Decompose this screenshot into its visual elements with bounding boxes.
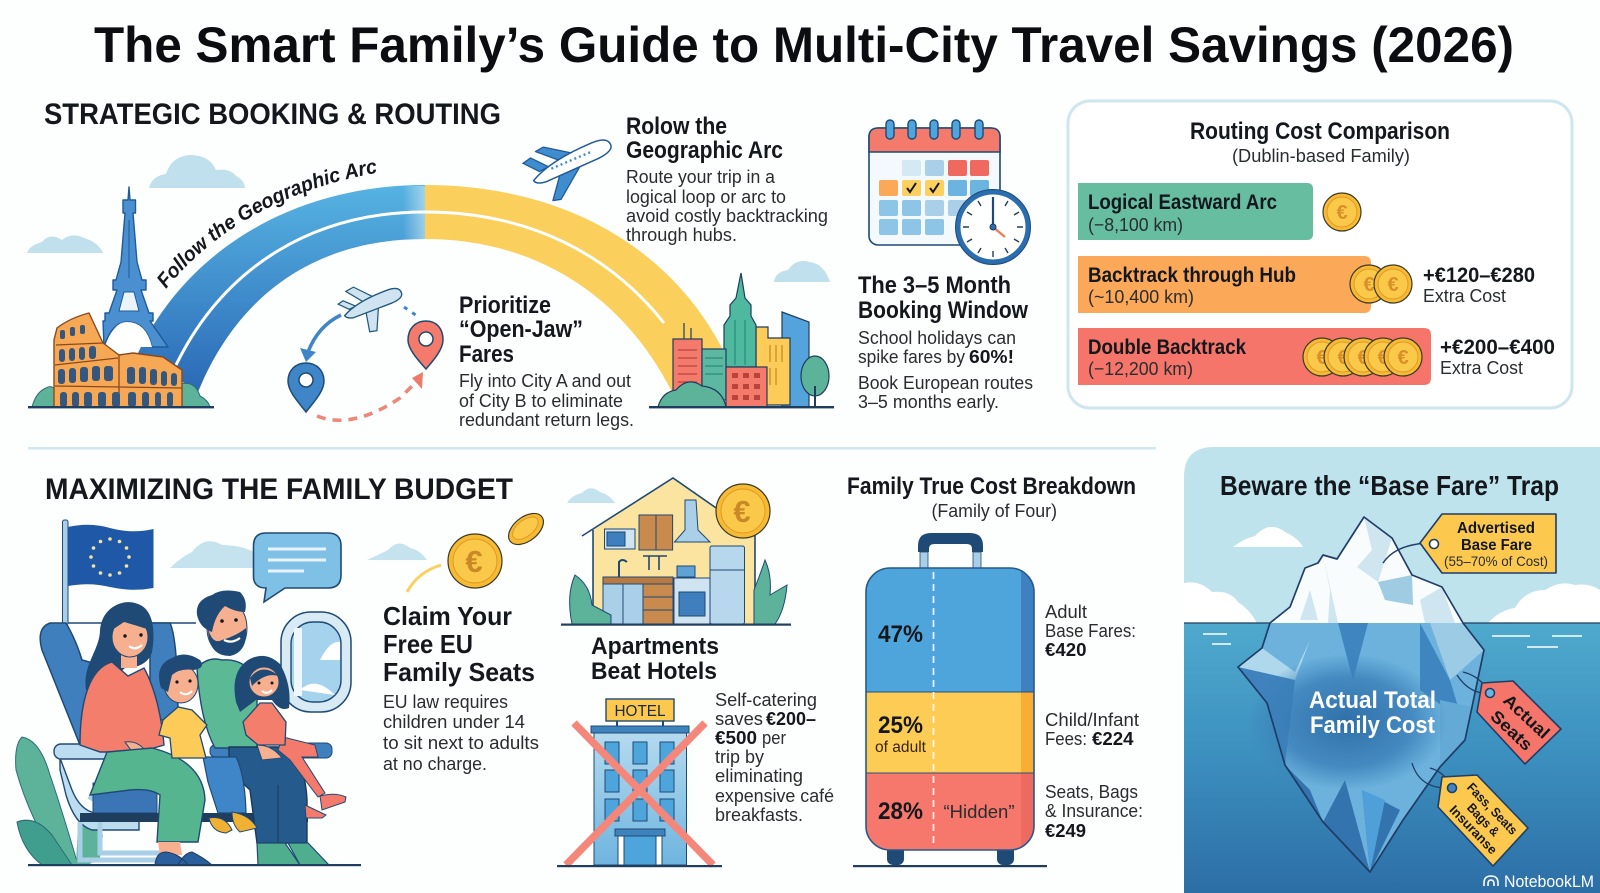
tag: fees seats bags insurance: Insuranse [1446,802,1500,857]
text block: self-catering: saves [715,708,763,729]
icon: speech bubble [253,533,341,602]
bar: logical eastward arc: € [1336,202,1348,224]
icon: eiffel tower [103,187,168,347]
text block: free EU family seats: at no charge. [383,753,487,774]
iceberg label: Family Cost [1310,712,1435,739]
bar: double backtrack: Extra Cost [1440,357,1523,378]
routing chart heading: Routing Cost Comparison [1190,118,1450,145]
bar: logical eastward arc: Logical Eastward Arc [1088,191,1277,214]
icon: airplane [520,122,623,208]
text block: booking window: School holidays can [858,327,1016,348]
text block: seats bags insurance: Seats, Bags [1045,781,1138,802]
label: 47 percent: 47% [878,621,923,648]
text block: self-catering: breakfasts. [715,804,803,825]
icon: boy [159,654,257,833]
icon: apartment kitchen [561,478,791,626]
chart heading: family true cost [847,473,1136,521]
text block: free EU family seats: to sit next to adults [383,732,539,753]
tag: advertised base fare [1383,514,1556,573]
geographic arc [138,162,722,391]
text block: self-catering: trip by [715,746,765,767]
text block: booking window: 60%! [969,346,1014,367]
arc label: Follow the Geographic Arc [157,162,376,289]
heading: strategic booking: STRATEGIC BOOKING & ROUTING [44,98,501,131]
bar: double backtrack: € [1316,347,1328,369]
watermark: NotebookLM: NotebookLM [1504,872,1594,891]
label: 25 percent [875,712,927,756]
chart heading: family true cost: (Family of Four) [932,500,1057,521]
icon: euro coins: € [465,544,483,579]
icon: airplane window [281,612,351,712]
tag: fees seats bags insurance [1412,763,1528,866]
text block: booking window: 3–5 months early. [858,391,999,412]
icon: EU flag [62,520,154,625]
text block: adult base fares [1045,601,1136,660]
icon: mother [80,602,212,865]
icon: iceberg [1238,517,1484,872]
text block: free EU family seats: Family Seats [383,657,535,687]
routing chart heading [1190,118,1450,166]
tag: fees seats bags insurance: Fass, Seats [1464,780,1521,838]
icon: father [197,591,329,865]
text block: self-catering: Self-catering [715,689,817,710]
text block: child infant fees: Fees: [1045,728,1087,749]
text block: open-jaw fares: redundant return legs. [459,409,634,430]
text block: booking window [858,272,1033,412]
label: 28 percent hidden: 28% [878,798,923,825]
text block: seats bags insurance: & Insurance: [1045,800,1143,821]
text block: follow the geographic arc: avoid costly backtracking [626,205,828,226]
bar: double backtrack: € [1377,347,1389,369]
title: The Smart Family’s Guide to Multi-City Travel Savings (2026) [94,17,1514,73]
tag: fees seats bags insurance: Bags & [1464,800,1503,839]
bar: logical eastward arc [1078,183,1361,240]
icon: apartment kitchen: € [733,494,751,529]
label: 25 percent: 25% [878,712,923,739]
text block: child infant fees [1045,709,1139,749]
bar: double backtrack: +€200–€400 [1440,336,1555,359]
icon: colosseum [28,313,214,408]
icon: open-jaw route [288,272,443,420]
bar: backtrack through hub: € [1363,274,1375,296]
bar: backtrack through hub: +€120–€280 [1423,264,1535,287]
text block: apartments beat hotels: Beat Hotels [591,658,717,685]
tag: actual seats: Seats [1487,707,1536,755]
text block: seats bags insurance: €249 [1045,820,1086,841]
panel: maximizing the family budget [16,473,1143,867]
bar: double backtrack: € [1397,347,1409,369]
text block: free EU family seats: Claim Your [383,601,512,631]
bar: backtrack through hub: (~10,400 km) [1088,286,1194,307]
text block: self-catering: expensive café [715,785,834,806]
bar: logical eastward arc: (−8,100 km) [1088,214,1183,235]
text block: open-jaw fares: Fares [459,341,514,368]
heading: family budget: MAXIMIZING THE FAMILY BUDGET [45,473,513,506]
text block: booking window: spike fares by [858,346,966,367]
icon: city skyline [649,273,834,408]
bar: backtrack through hub: € [1387,274,1399,296]
text block: self-catering: €500 [715,727,757,748]
text block: self-catering [715,689,834,825]
text block: free EU family seats [383,601,539,774]
bar: double backtrack: (−12,200 km) [1088,358,1193,379]
text block: open-jaw fares: “Open-Jaw” [459,316,583,343]
heading: base fare trap: Beware the “Base Fare” Trap [1220,470,1559,501]
bar: backtrack through hub: Backtrack through Hub [1088,264,1296,287]
icon: plant [16,737,103,865]
tag: advertised base fare: Advertised [1457,520,1535,537]
icon: euro coins [407,507,549,592]
text block: free EU family seats: Free EU [383,629,473,659]
iceberg label [1309,687,1436,739]
text block: seats bags insurance [1045,781,1143,841]
icon: crossed-out hotel: HOTEL [614,703,666,720]
bar: double backtrack: Double Backtrack [1088,336,1246,359]
text block: follow the geographic arc: Rolow the [626,113,727,140]
text block: open-jaw fares: Prioritize [459,292,551,319]
text block: open-jaw fares [459,292,634,430]
text block: adult base fares: Adult [1045,601,1087,622]
text block: apartments beat hotels: Apartments [591,633,719,660]
tag: actual seats [1457,672,1561,764]
bar: backtrack through hub [1078,256,1535,313]
text block: follow the geographic arc: Route your trip in a [626,166,776,187]
bar: double backtrack: € [1357,347,1369,369]
text block: child infant fees: €224 [1092,728,1134,749]
text block: follow the geographic arc [626,113,828,245]
text block: free EU family seats: EU law requires [383,691,508,712]
icon: girl [234,656,346,818]
tag: advertised base fare: (55–70% of Cost) [1444,553,1548,569]
chart: suitcase cost breakdown [853,533,1047,867]
text block: self-catering: per [762,727,786,748]
tag: actual seats: Actual [1499,691,1553,743]
text block: booking window: Book European routes [858,372,1033,393]
text block: follow the geographic arc: Geographic Arc [626,137,783,164]
bar: backtrack through hub: Extra Cost [1423,285,1506,306]
icon: airplane seats [40,623,332,860]
label: 25 percent: of adult [875,739,927,756]
text block: booking window: Booking Window [858,297,1028,324]
chart heading: family true cost: Family True Cost Breakdown [847,473,1136,500]
text block: apartments beat hotels [591,633,719,685]
text block: self-catering: eliminating [715,765,803,786]
text block: follow the geographic arc: logical loop or arc to [626,186,786,207]
text block: booking window: The 3–5 Month [858,272,1011,299]
label: 28 percent hidden [878,798,1014,825]
bar: double backtrack [1078,328,1555,385]
text block: open-jaw fares: of City B to eliminate [459,390,623,411]
bar: double backtrack: € [1337,347,1349,369]
text block: adult base fares: Base Fares: [1045,620,1136,641]
icon: calendar and clock [869,120,1030,264]
tag: advertised base fare: Base Fare [1461,537,1532,554]
icon: crossed-out hotel [557,699,722,867]
iceberg label: Actual Total [1309,687,1436,714]
text block: adult base fares: €420 [1045,639,1086,660]
text block: free EU family seats: children under 14 [383,711,525,732]
text block: follow the geographic arc: through hubs. [626,224,737,245]
routing chart heading: (Dublin-based Family) [1232,145,1410,166]
panel: routing cost comparison [1068,101,1572,408]
decorative clouds [170,541,427,568]
text block: open-jaw fares: Fly into City A and out [459,370,631,391]
text block: child infant fees: Child/Infant [1045,709,1139,730]
panel: base fare trap [1184,447,1600,893]
decorative clouds [27,155,830,282]
panel: strategic booking and routing [27,98,1574,430]
text block: self-catering: €200– [766,708,816,729]
label: 28 percent hidden: “Hidden” [944,801,1014,822]
